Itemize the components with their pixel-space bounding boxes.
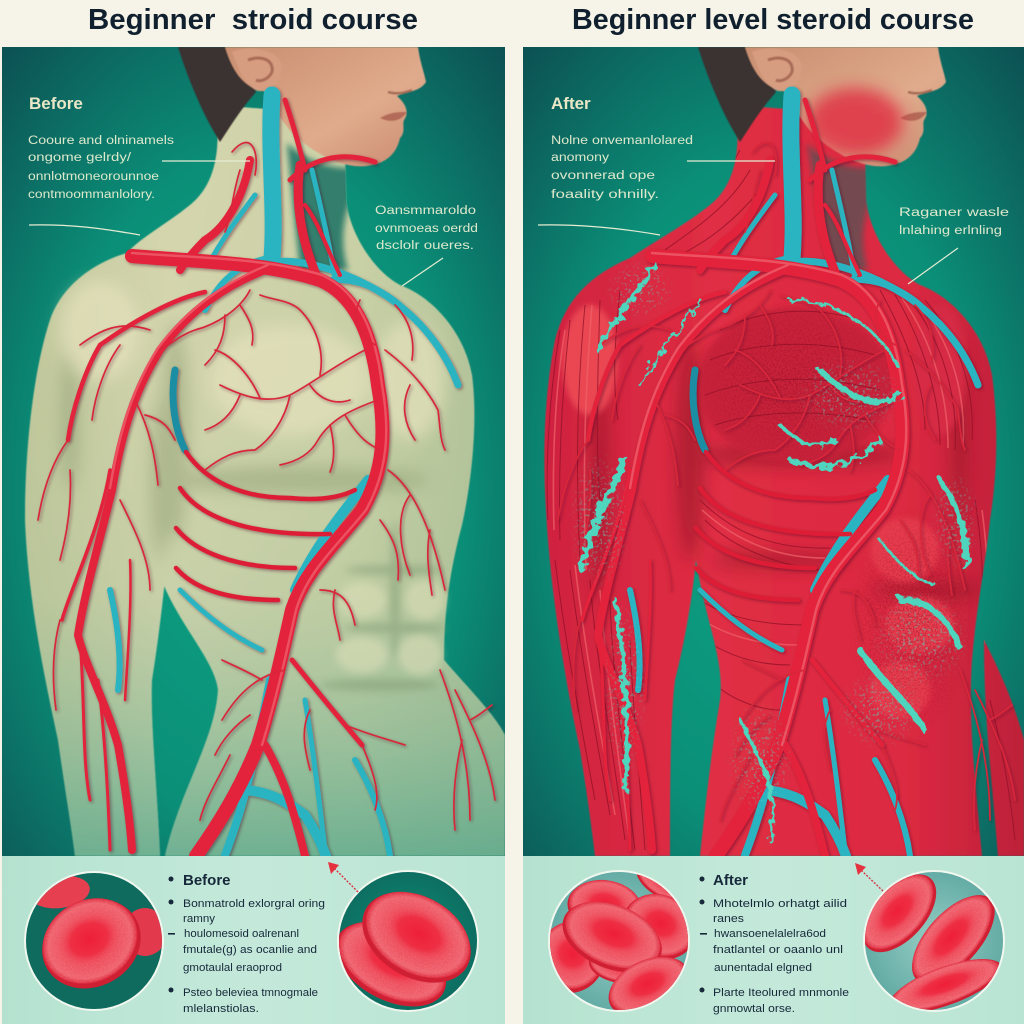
bullet notes [168, 872, 325, 1015]
arrow: red dashed [328, 862, 358, 892]
muscle striations [547, 130, 1015, 850]
bullet notes: ranes [713, 913, 745, 925]
neck shadow [804, 142, 871, 274]
callout text: upper right [375, 205, 478, 252]
callout text: upper left: anomony [551, 152, 609, 164]
callout text: upper right: dsclolr oueres. [376, 240, 474, 252]
callout text: upper left: ovonnerad ope [551, 170, 655, 182]
callout text: upper right [899, 207, 1009, 237]
panel: after cells and notes [523, 851, 1024, 1024]
arrow: red dashed [855, 863, 883, 891]
circle: single blood cell [25, 872, 167, 1010]
bullet notes: fnatlantel or oaanlo unl [713, 944, 843, 956]
bullet notes: aunentadal elgned [714, 962, 812, 974]
chest and abdomen texture [715, 320, 962, 716]
bullet notes: fmutale(g) as ocanlie and [183, 944, 317, 956]
neck shadow [283, 141, 352, 274]
callout text: upper left: ongome gelrdy/ [28, 152, 132, 164]
panel: after anatomy [523, 47, 1024, 856]
callout lines [29, 161, 443, 286]
head: hair, face and ear [698, 47, 946, 166]
bullet notes: Psteo beleviea tmnogmale [183, 987, 318, 999]
blood vessels [38, 95, 495, 856]
blood vessels [558, 95, 1015, 856]
bullet notes: houlomesoid oalrenanl [184, 928, 299, 940]
heading: before: Before [183, 872, 231, 889]
bullet notes: Plarte Iteolured mnmonle [713, 987, 849, 999]
callout text: upper left: onnlotmoneorounnoe [28, 171, 159, 183]
callout text: upper right: Oansmmaroldo [375, 205, 476, 217]
callout text: upper right: lnlahing erlnling [899, 225, 1002, 237]
bullet notes: ramny [183, 913, 216, 925]
callout text: upper right: Raganer wasle [899, 207, 1009, 219]
callout text: upper left: Cooure and olninamels [28, 135, 174, 147]
heading: after: After [713, 872, 748, 889]
circle: separated blood cells [863, 870, 1005, 1012]
muscle highlights [553, 298, 988, 845]
abdominal muscles [562, 305, 966, 718]
callout text: upper right: ovnmoeas oerdd [375, 223, 478, 235]
muscular red body [544, 105, 1024, 856]
circle: clustered blood cells [548, 870, 690, 1012]
bullet notes: Mhotelmlo orhatgt ailid [713, 898, 847, 910]
callout text: upper left: contmoommanlolory. [28, 189, 155, 201]
title: left: Beginner stroid course [88, 4, 418, 36]
head: hair, face and ear [178, 47, 426, 166]
label: before: Before [29, 94, 83, 113]
callout text: upper left: foaality ohnilly. [551, 189, 659, 201]
abdominal muscle blocks [320, 520, 447, 691]
panel: before cells and notes [2, 856, 505, 1024]
callout lines [538, 161, 958, 284]
bullet notes [700, 872, 849, 1015]
title: right: Beginner level steroid course [572, 4, 974, 36]
callout text: upper left [551, 135, 693, 201]
torso body silhouette [25, 105, 505, 856]
teal deposits [580, 265, 966, 840]
bullet notes: gmotaulal eraoprod [183, 962, 282, 974]
dark muscle shading [591, 340, 990, 600]
bullet notes: gnmowtal orse. [713, 1003, 795, 1015]
label: after: After [551, 94, 591, 113]
teal speckled patches [568, 260, 980, 820]
bullet notes: mlelanstiolas. [183, 1003, 259, 1015]
bullet notes: Bonmatrold exlorgral oring [183, 898, 325, 910]
callout text: upper left [28, 135, 174, 201]
panel: before anatomy [2, 47, 505, 856]
bullet notes: hwansoenelalelra6od [714, 928, 826, 940]
circle: stacked blood cells [337, 870, 479, 1012]
callout text: upper left: Nolne onvemanlolared [551, 135, 693, 147]
chest muscle [697, 307, 893, 463]
